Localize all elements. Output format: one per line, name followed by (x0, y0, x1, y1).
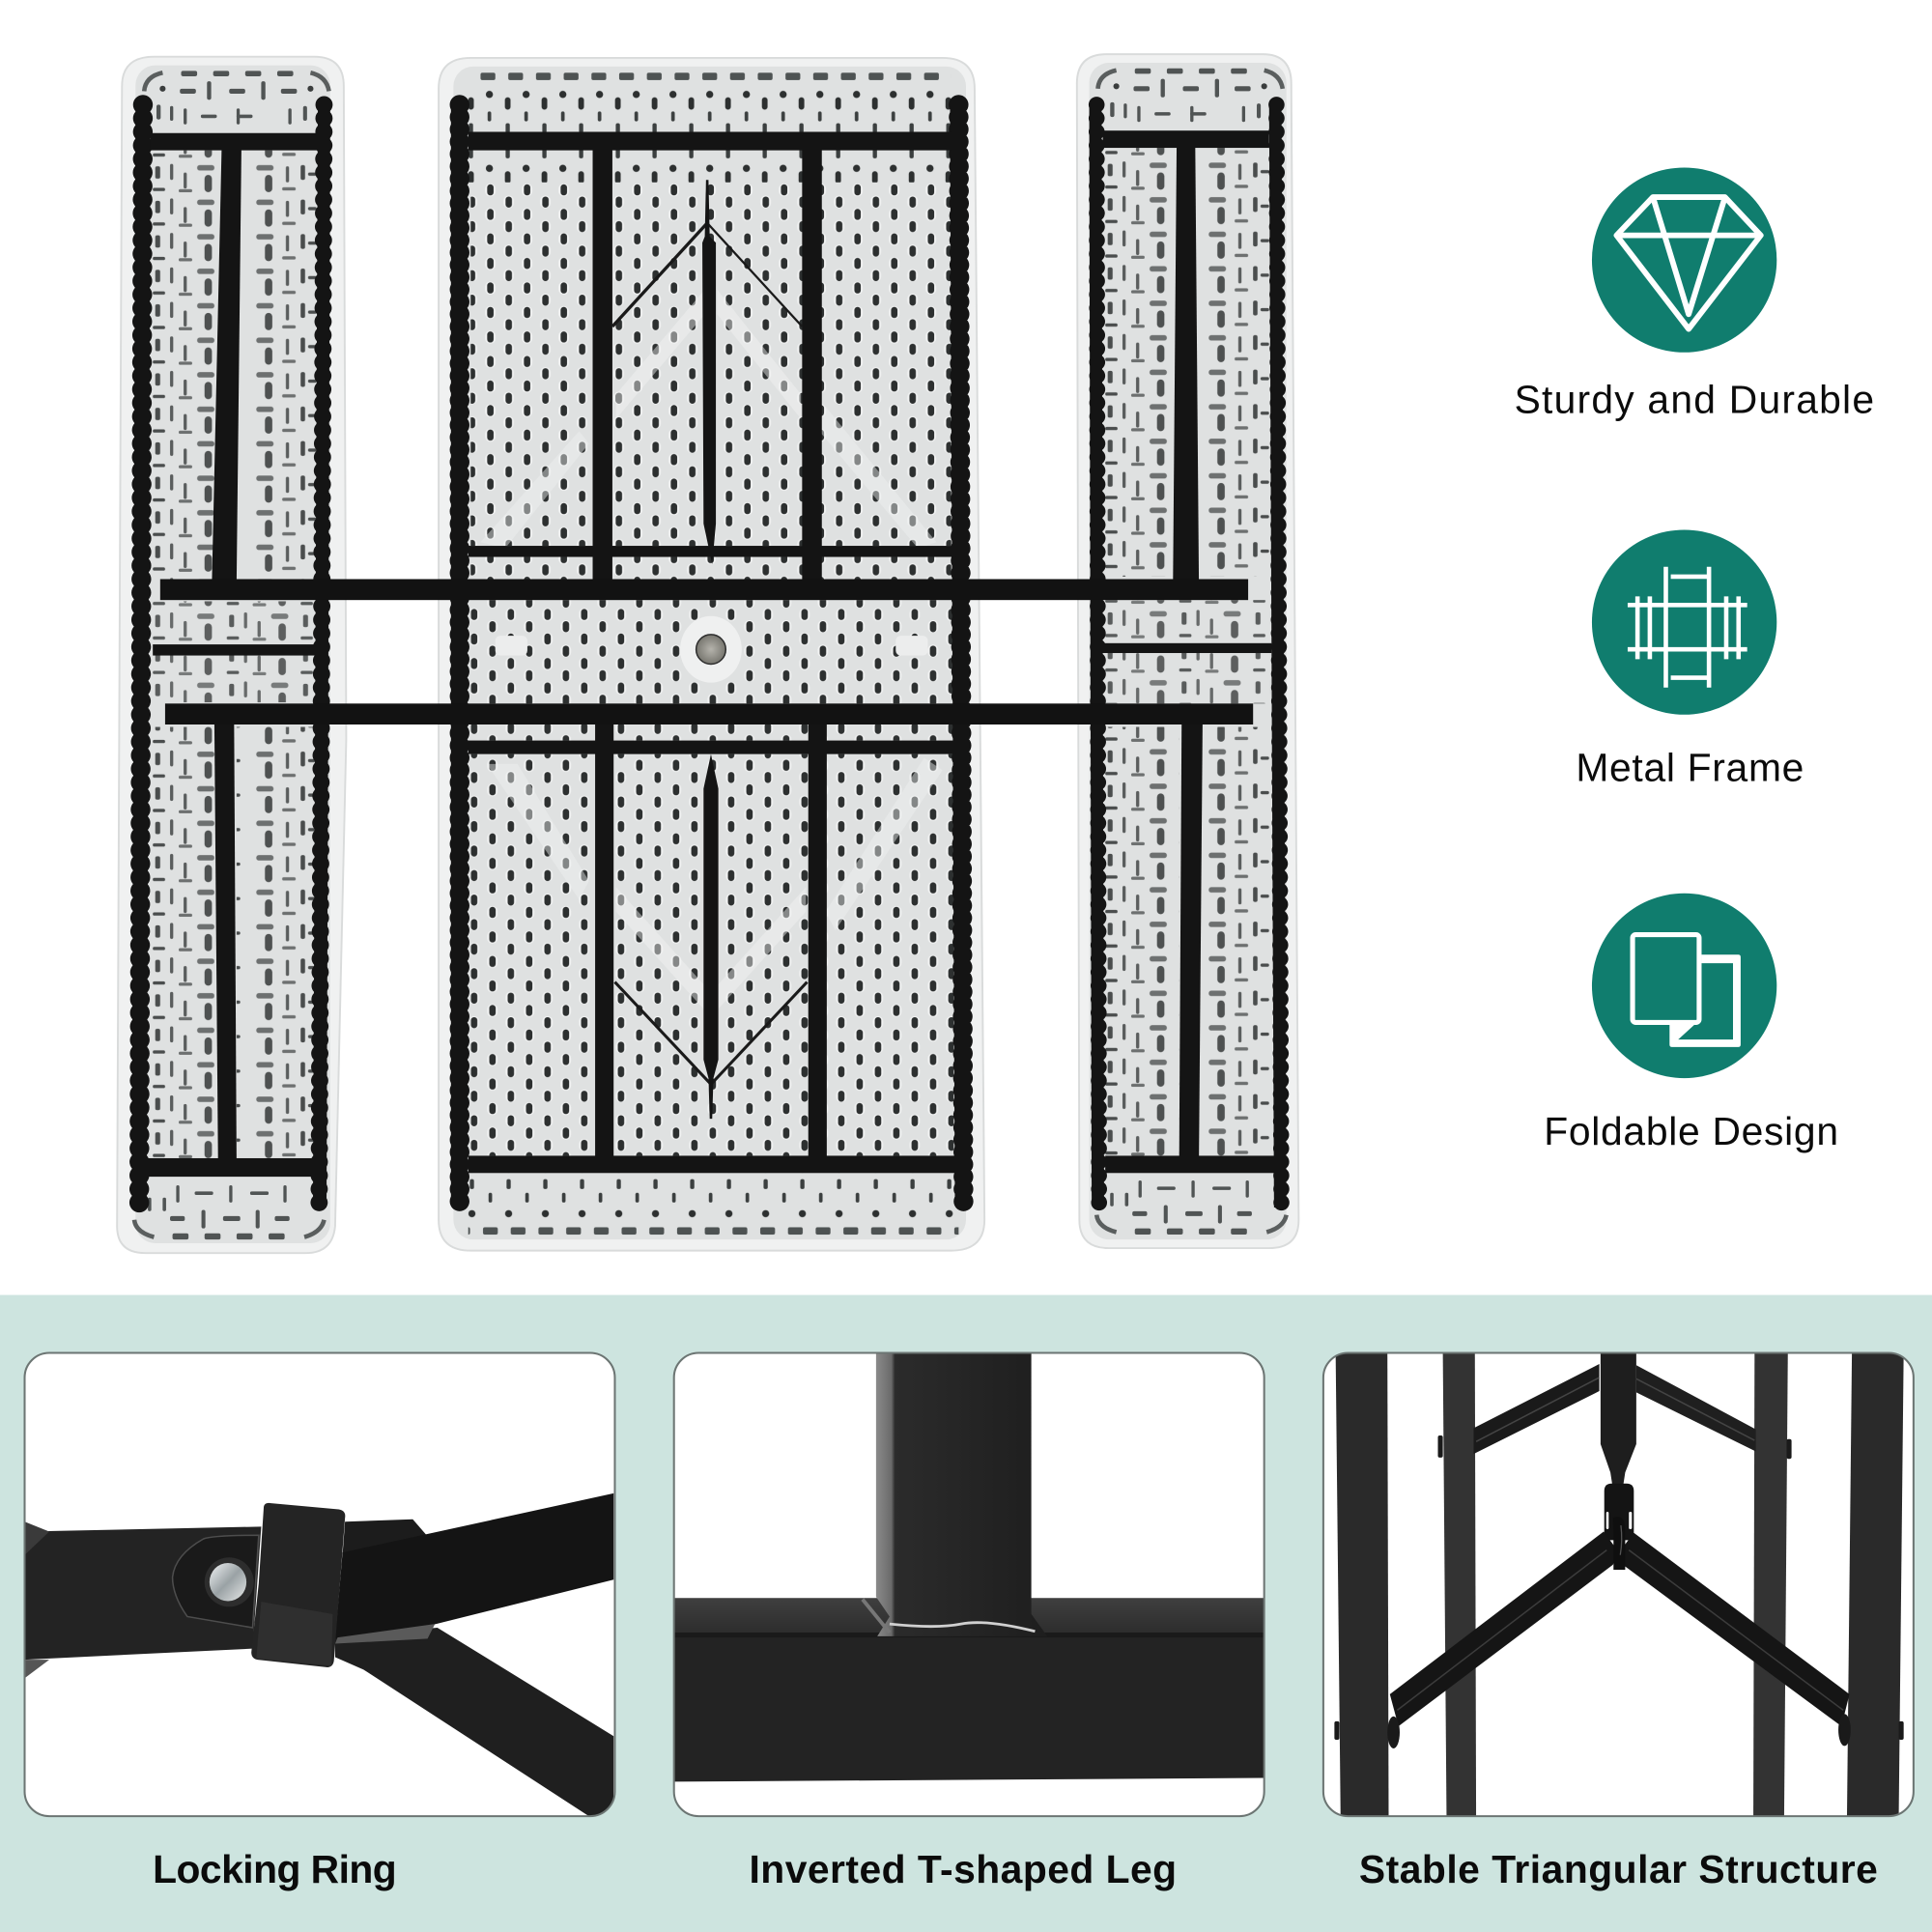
frame: table legs (451, 102, 971, 1205)
lower arm (335, 1628, 613, 1816)
panel: centre table top (439, 58, 984, 1251)
side latch blocks (496, 636, 927, 656)
upright (876, 1353, 1047, 1636)
centre bar (1601, 1353, 1636, 1489)
panel: left bench top (117, 57, 346, 1253)
label: inverted T-shaped leg: Inverted T-shaped Leg (750, 1847, 1177, 1891)
label: sturdy and durable: Sturdy and Durable (1515, 377, 1874, 421)
bolts (1334, 1435, 1904, 1748)
card: locking ring (25, 1353, 614, 1816)
panel: bottom band (0, 1295, 1932, 1932)
icon: foldable (1592, 894, 1776, 1078)
ring band (251, 1503, 345, 1667)
label: locking ring: Locking Ring (153, 1847, 397, 1891)
card: triangular structure (1323, 1353, 1914, 1816)
frame: right bench legs (1090, 103, 1287, 1208)
ring hook (1613, 1540, 1625, 1570)
panel: right bench top (1077, 54, 1298, 1248)
long bench support bars (160, 579, 1253, 724)
label: stable triangular structure: Stable Triangular Structure (1359, 1847, 1878, 1891)
upper braces (1474, 1364, 1600, 1454)
umbrella hole (680, 616, 742, 683)
left bar (25, 1526, 261, 1660)
icon: diamond (1592, 167, 1776, 353)
icon: metal frame (1592, 529, 1776, 715)
lower braces (1390, 1531, 1619, 1726)
strap slots (1606, 1512, 1632, 1529)
weld (890, 1623, 1035, 1632)
frame: left bench legs (131, 101, 330, 1208)
base bar (674, 1598, 1264, 1781)
card: inverted T leg (674, 1353, 1264, 1816)
label: foldable design: Foldable Design (1544, 1109, 1838, 1153)
upper bracket (343, 1520, 429, 1555)
label: metal frame: Metal Frame (1576, 746, 1804, 790)
collar and straps (1605, 1484, 1634, 1540)
right arm (335, 1493, 613, 1638)
outer and inner legs (1336, 1353, 1389, 1816)
lower brace (614, 754, 807, 1119)
bolt (205, 1557, 254, 1606)
bolt plate (173, 1535, 259, 1628)
upper brace (612, 180, 802, 564)
